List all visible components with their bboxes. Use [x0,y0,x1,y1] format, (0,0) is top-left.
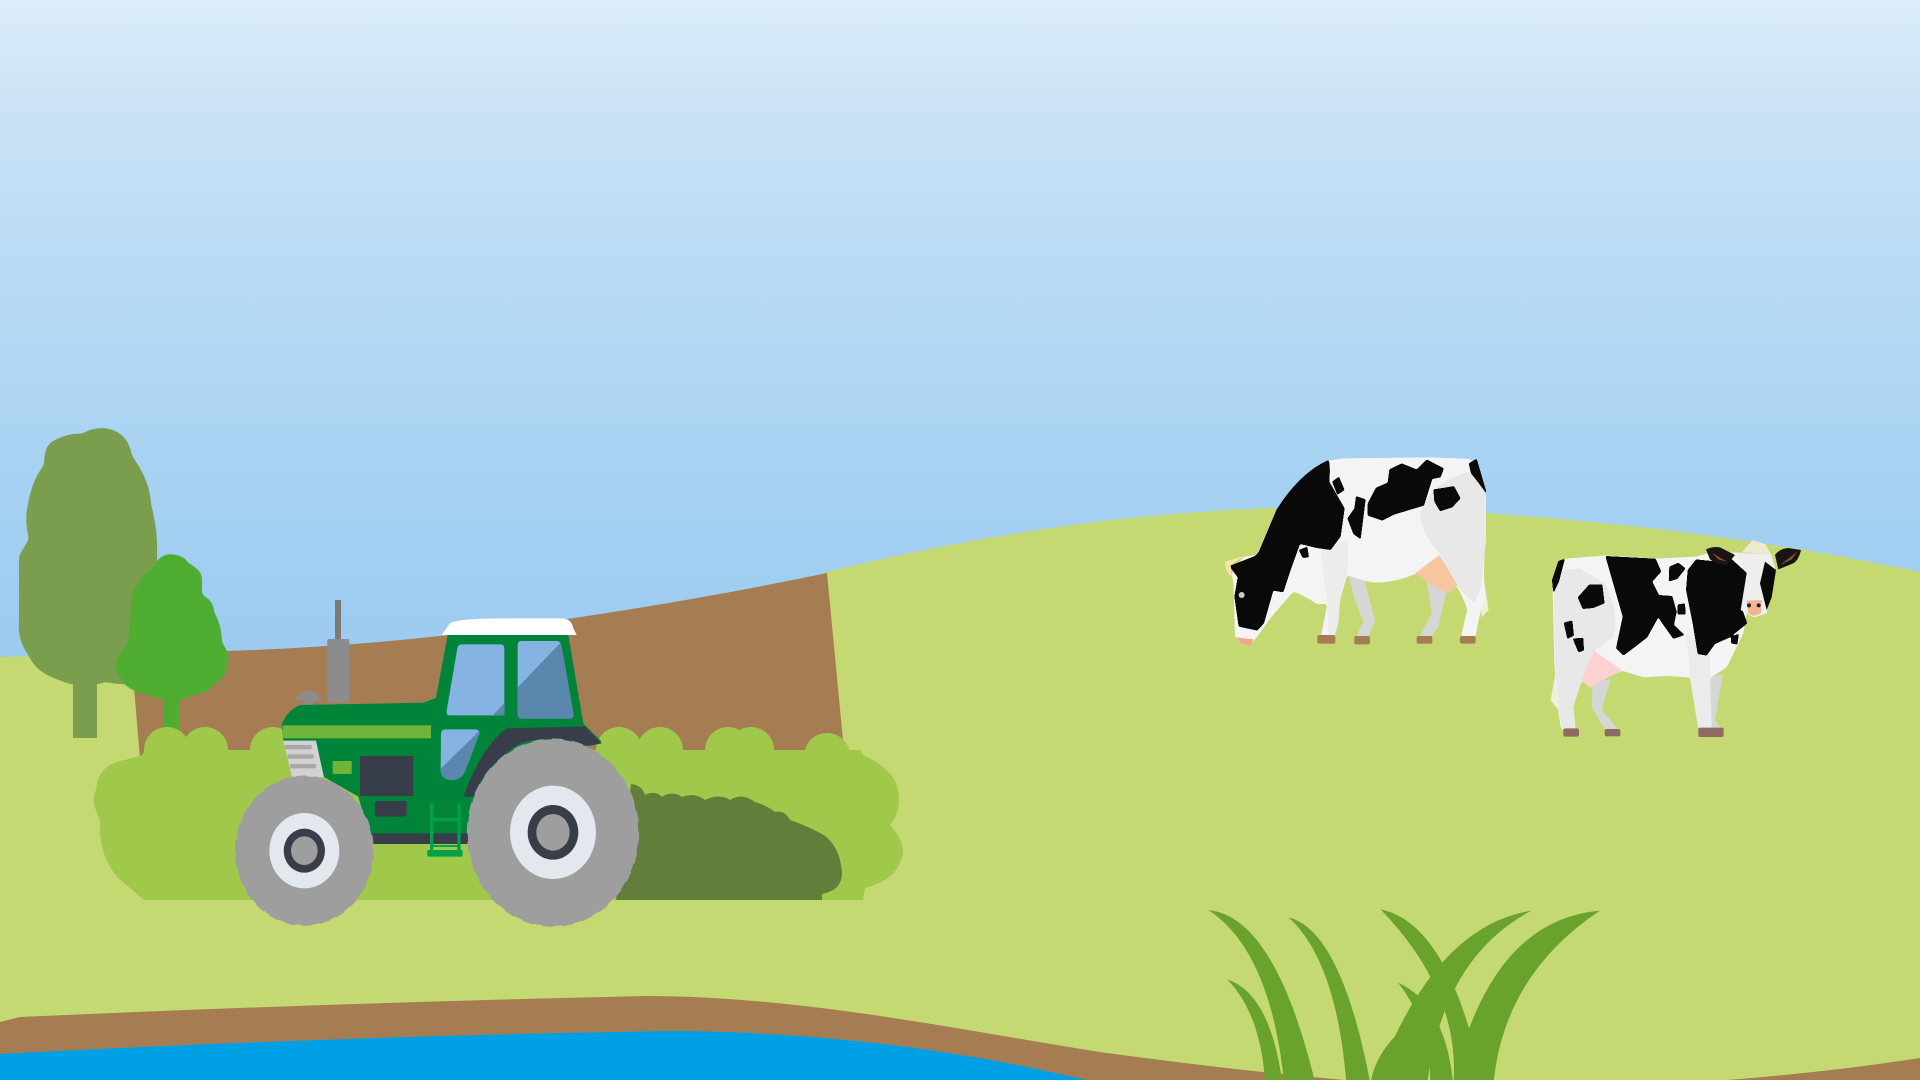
blade [1208,910,1314,1080]
reeds [1208,909,1600,1080]
cow grazing [1225,457,1489,645]
head tuft [1742,540,1771,553]
tail [1551,663,1563,709]
hedge [94,727,903,900]
rear fender [463,727,602,797]
cab window left [447,644,504,715]
river bank right [1727,1058,1920,1080]
ladder [427,803,463,857]
far legs [1592,675,1723,731]
exhaust stack [327,600,349,702]
right cheek [1760,562,1776,610]
blade [1454,911,1600,1080]
udder [1415,555,1457,594]
hind leg shade [1420,472,1486,603]
chassis bar [372,833,468,844]
tree: tall olive [19,428,157,738]
lower vent [375,801,407,817]
lime badge [333,761,352,774]
black patch: head and neck [1229,460,1345,631]
body [1232,457,1486,645]
eye [1239,592,1245,598]
engine panel [360,756,413,796]
far legs [1348,575,1447,636]
left ear [1706,547,1735,565]
tractor [236,600,638,926]
river bank [0,996,1345,1080]
udder [1582,651,1622,688]
grille [283,741,324,777]
hooves [1563,728,1724,737]
tractor body [282,635,602,844]
cab roof [442,618,577,635]
meadow [0,507,1920,1080]
hind leg shade [1554,568,1615,728]
ploughed field [134,573,845,770]
rear wheel [468,739,638,926]
forelock [1225,556,1245,577]
hooves [1317,635,1476,644]
blade [1371,911,1532,1080]
right ear [1775,548,1801,569]
sky [0,0,1920,680]
blade [1289,917,1370,1080]
hood stripe [283,725,431,738]
door window [441,729,479,780]
body [1553,553,1750,729]
dark hedge [616,784,842,900]
blade [1381,909,1482,1080]
front leg shade [1321,540,1348,637]
air intake cap [295,691,322,706]
tail [1479,570,1489,617]
blade [1227,979,1282,1080]
black spots [1552,556,1749,656]
head [1737,553,1775,617]
front wheel [236,776,373,925]
river [0,1031,1086,1080]
tree: small bright green [115,554,229,735]
blade [1398,983,1453,1080]
front leg shade [1687,633,1712,728]
muzzle [1236,637,1253,645]
black spots [1299,459,1487,558]
cow standing [1551,540,1801,737]
nose [1747,600,1762,616]
cab window right [518,641,573,719]
